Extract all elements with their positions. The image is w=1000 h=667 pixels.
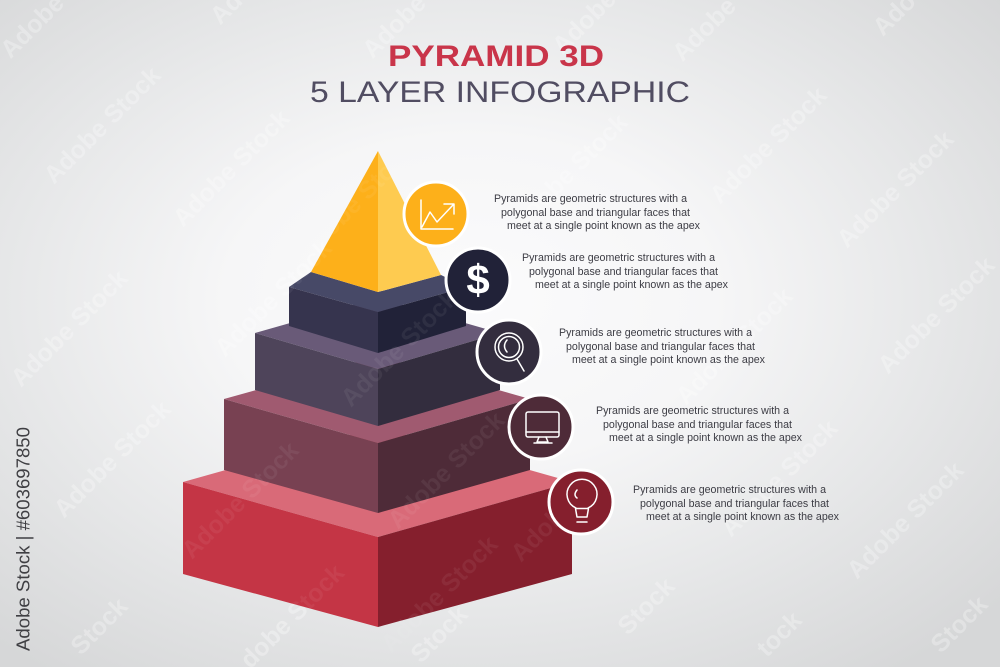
title: 5 LAYER INFOGRAPHIC — [310, 76, 690, 109]
icon: magnifier in purple circle — [477, 320, 541, 384]
icon: line chart in yellow circle — [404, 182, 468, 246]
watermarks: Adobe Stock — [38, 61, 166, 189]
text block 5: meet at a single point known as the apex — [646, 511, 839, 523]
text block 5: Pyramids are geometric structures with a — [633, 484, 827, 496]
watermarks: Stock — [612, 572, 680, 640]
watermarks: Adobe Stock — [704, 81, 832, 209]
icon: dollar in navy circle — [446, 248, 510, 312]
watermarks over pyramid — [176, 137, 633, 667]
layer 3: purple — [255, 298, 500, 426]
text block 1: polygonal base and triangular faces that — [501, 207, 690, 219]
watermarks over pyramid: Adobe Stock — [292, 137, 420, 265]
watermarks: Adobe Stock — [5, 264, 133, 392]
watermarks over pyramid: Adobe Stock — [176, 436, 304, 564]
text block 2: meet at a single point known as the apex — [535, 279, 728, 291]
layer 2: navy — [289, 272, 466, 353]
watermarks over pyramid: Adobe Stock — [505, 439, 633, 567]
text block 2: Pyramids are geometric structures with a — [522, 252, 716, 264]
text block 3: meet at a single point known as the apex — [572, 354, 765, 366]
watermarks: Adobe Stock — [715, 414, 843, 542]
watermarks: Stock — [65, 592, 133, 660]
watermarks: Adobe Stock — [48, 395, 176, 523]
text block 2: polygonal base and triangular faces that — [529, 266, 718, 278]
text block 1: meet at a single point known as the apex — [507, 220, 700, 232]
watermarks: Adobe Stock — [841, 456, 969, 584]
watermarks: Stock — [405, 600, 473, 667]
watermarks: Adobe Stock — [872, 251, 1000, 379]
text block 1: Pyramids are geometric structures with a — [494, 193, 688, 205]
layer 4: maroon — [224, 356, 530, 513]
watermarks: Adobe Stock — [209, 234, 337, 362]
text block 4: Pyramids are geometric structures with a — [596, 405, 790, 417]
watermarks over pyramid: Adobe Stock — [209, 234, 337, 362]
text block 3: Pyramids are geometric structures with a — [559, 327, 753, 339]
watermarks: Adobe Stock — [670, 282, 798, 410]
icon: dollar in navy circle: $ — [466, 256, 490, 303]
text block 3: polygonal base and triangular faces that — [566, 341, 755, 353]
icon: monitor in maroon circle — [509, 395, 573, 459]
text block 1 — [494, 193, 700, 232]
text block 4: polygonal base and triangular faces that — [603, 419, 792, 431]
title: PYRAMID 3D — [388, 40, 604, 73]
text block 2 — [522, 252, 728, 291]
text block 4 — [596, 405, 802, 444]
title — [310, 40, 690, 109]
watermarks over pyramid: Adobe Stock — [375, 530, 503, 658]
text block 4: meet at a single point known as the apex — [609, 432, 802, 444]
layer 5: red base — [183, 427, 572, 627]
watermarks: tock — [751, 606, 807, 662]
watermarks: Adobe Stock — [505, 108, 633, 236]
text block 5 — [633, 484, 839, 523]
icon: light bulb in red circle — [549, 470, 613, 534]
watermarks: Stock — [925, 590, 993, 658]
watermarks: Adobe Stock — [831, 125, 959, 253]
text block 3 — [559, 327, 765, 366]
layer 1: yellow apex — [311, 151, 441, 292]
watermarks over pyramid: Adobe Stock — [335, 284, 463, 412]
watermarks: Adobe Stock — [167, 104, 295, 232]
text block 5: polygonal base and triangular faces that — [640, 498, 829, 510]
stock id label: Adobe Stock | #603697850 — [14, 427, 34, 651]
watermarks over pyramid: Adobe Stock — [382, 406, 510, 534]
